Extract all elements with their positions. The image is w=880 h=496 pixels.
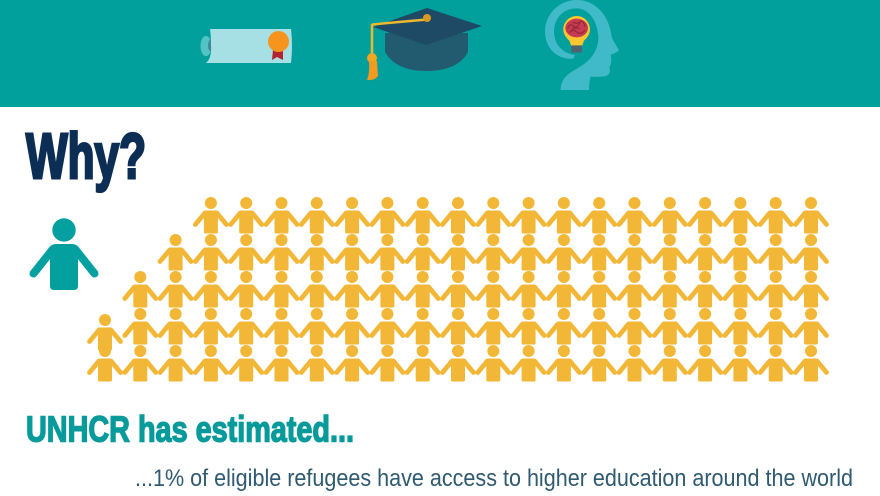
icon: diploma scroll xyxy=(200,29,292,63)
icon: graduation cap xyxy=(367,8,482,80)
title: Why? xyxy=(26,120,146,192)
row 1 of people xyxy=(195,197,826,234)
pictogram chart: 99 yellow people xyxy=(90,197,826,382)
icon: head with light-bulb brain xyxy=(545,0,619,90)
header band xyxy=(0,0,880,107)
row 2 of people xyxy=(160,234,827,270)
subheading: UNHCR has estimated... xyxy=(26,408,354,450)
row 5 of people xyxy=(90,345,826,382)
icon: single teal person xyxy=(34,218,94,290)
row 4 of people xyxy=(90,308,826,350)
row 3 of people xyxy=(125,271,827,308)
